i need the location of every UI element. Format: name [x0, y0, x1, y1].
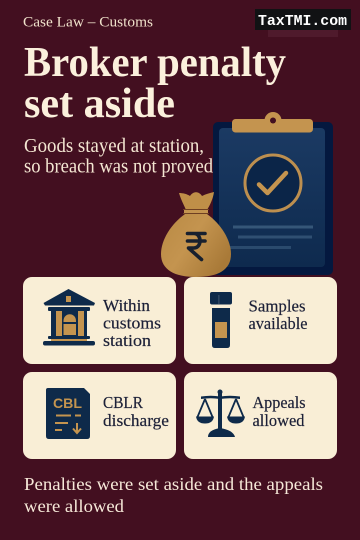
icon: scales of justice	[196, 390, 245, 437]
label: CBLR	[103, 393, 144, 412]
icon: rupee money bag	[161, 192, 231, 277]
panel: within customs station	[23, 277, 176, 364]
label: allowed	[252, 411, 305, 430]
label: station	[103, 331, 152, 350]
label: Within	[103, 296, 150, 315]
label: Appeals	[252, 393, 306, 412]
logo: TaxTMI.com: TaxTMI.com	[258, 14, 347, 30]
label	[252, 393, 306, 430]
icon: sample vial	[210, 292, 232, 348]
title	[24, 40, 286, 127]
title: Broker penalty	[24, 40, 286, 86]
icon: CBL document: CBL	[53, 395, 82, 411]
label: discharge	[103, 411, 169, 430]
label	[248, 296, 308, 333]
icon: CBL document	[46, 388, 90, 439]
label	[103, 296, 161, 350]
conclusion text	[24, 474, 323, 516]
logo: TaxTMI.com	[255, 9, 351, 37]
panel: samples available	[184, 277, 337, 364]
label	[103, 393, 169, 430]
subtitle: so breach was not proved	[24, 156, 213, 178]
label: available	[248, 314, 308, 333]
subtitle: Goods stayed at station,	[24, 135, 204, 157]
conclusion text: Penalties were set aside and the appeals	[24, 474, 323, 494]
rupee symbol	[188, 234, 205, 260]
label: Samples	[248, 296, 306, 316]
title: set aside	[24, 81, 175, 127]
eyebrow label: Case Law – Customs	[23, 14, 153, 30]
subtitle	[24, 135, 213, 178]
conclusion text: were allowed	[24, 496, 124, 516]
icon: clipboard with check	[213, 112, 333, 275]
panel: CBLR discharge	[23, 372, 176, 459]
icon: customs building	[43, 289, 95, 346]
panel: appeals allowed	[184, 372, 337, 459]
label: customs	[103, 314, 161, 332]
